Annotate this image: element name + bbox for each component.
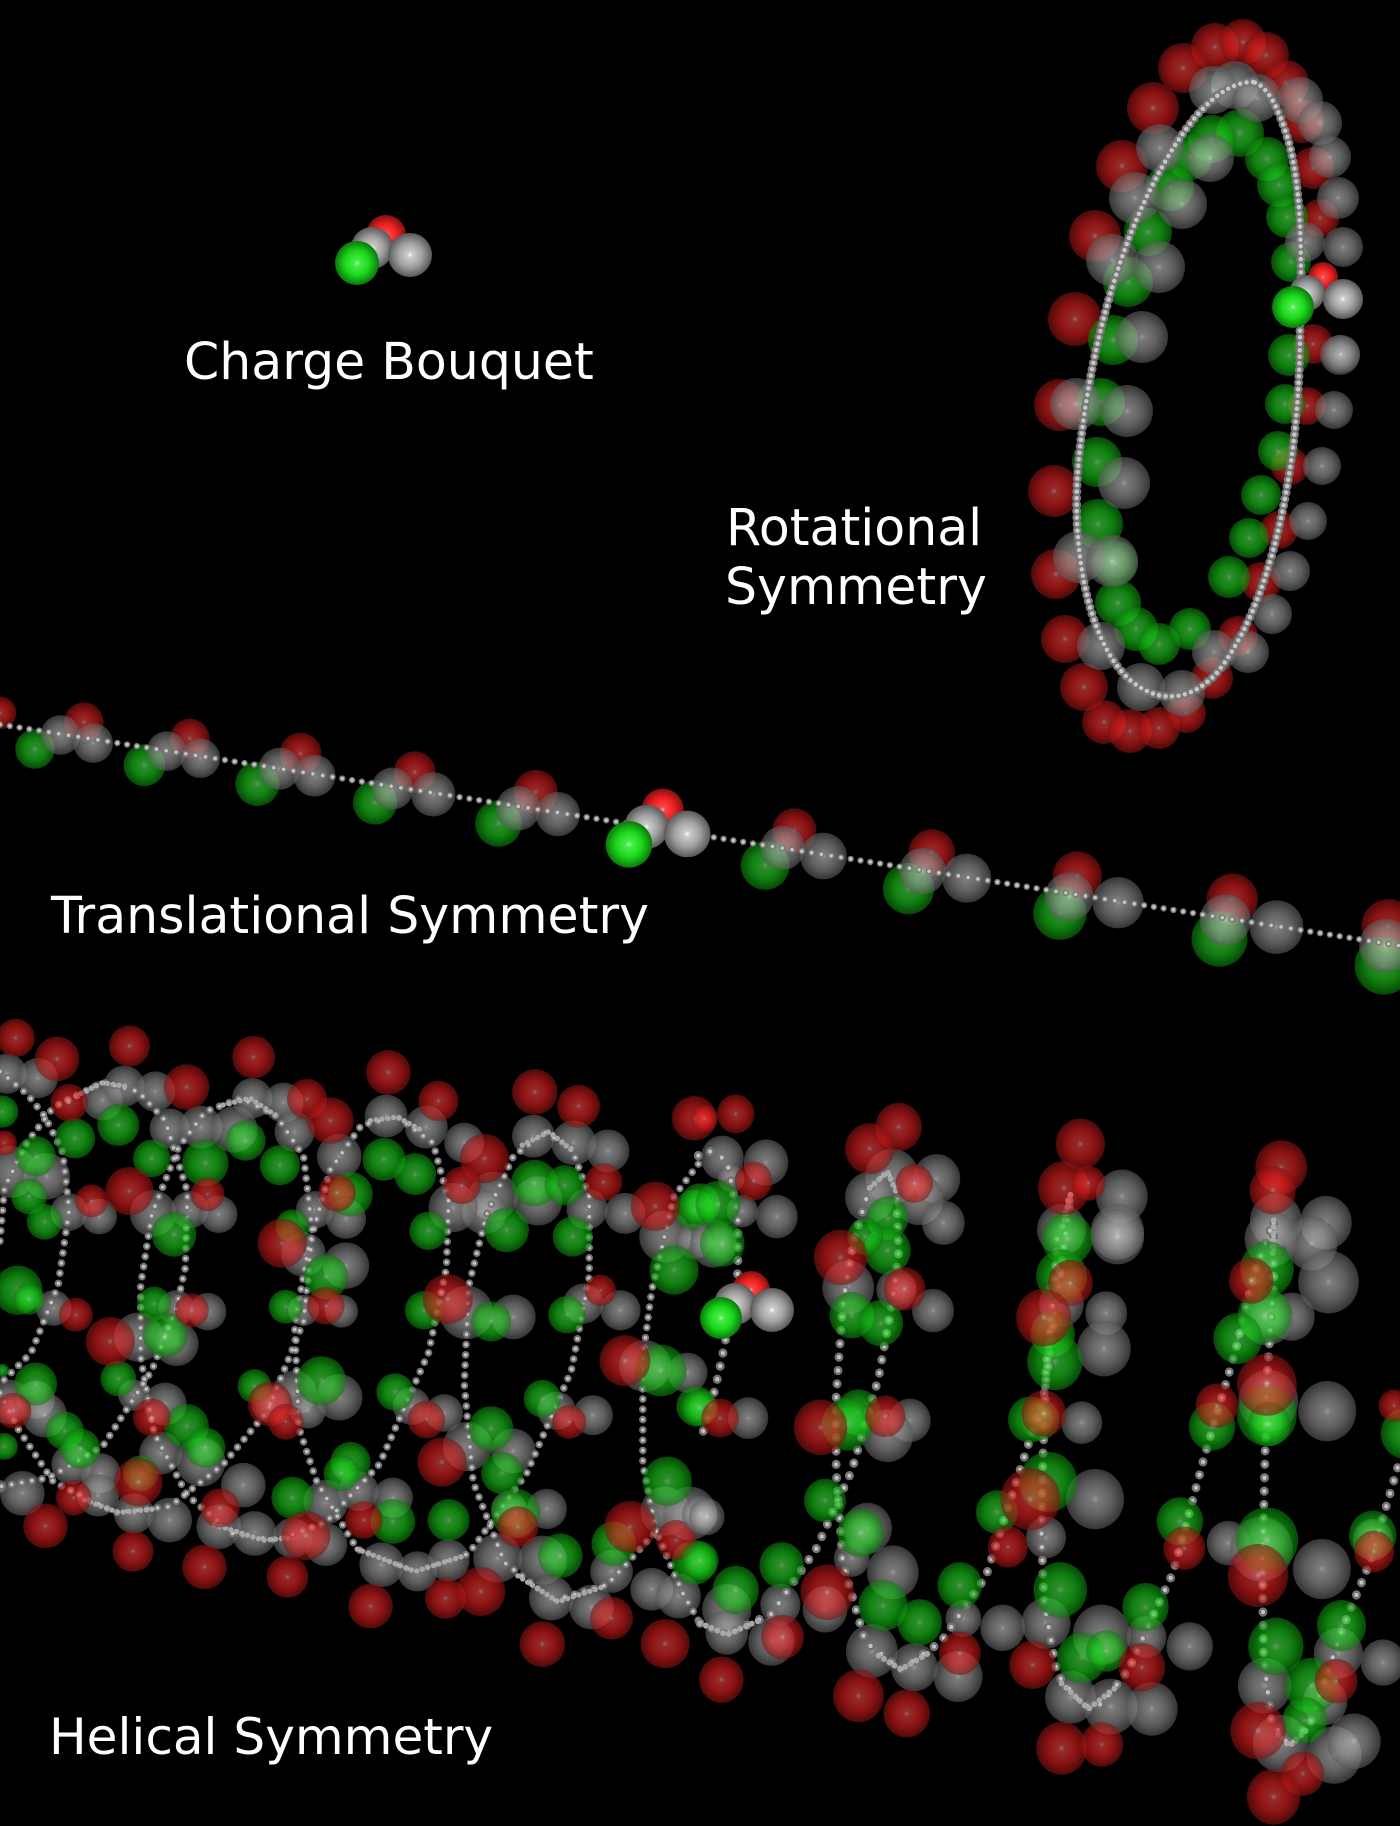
- helical symmetry, right half: [680, 1094, 1400, 1825]
- rotational symmetry ring: [1028, 19, 1363, 753]
- heading: Charge Bouquet: Charge Bouquet: [184, 332, 594, 391]
- heading: Translational Symmetry: Translational Symmetry: [50, 886, 649, 945]
- chain charge bouquet: [606, 789, 710, 868]
- ring charge bouquet: [1272, 262, 1363, 328]
- heading: Rotational Symmetry: Rotational: [726, 498, 982, 557]
- helical symmetry, left half: [0, 1019, 716, 1668]
- heading: Rotational Symmetry: Symmetry: [725, 557, 987, 616]
- helix charge bouquet: [700, 1271, 794, 1339]
- charge bouquet molecule: [335, 215, 432, 285]
- translational symmetry chain: [0, 696, 1400, 995]
- heading: Helical Symmetry: Helical Symmetry: [49, 1707, 493, 1766]
